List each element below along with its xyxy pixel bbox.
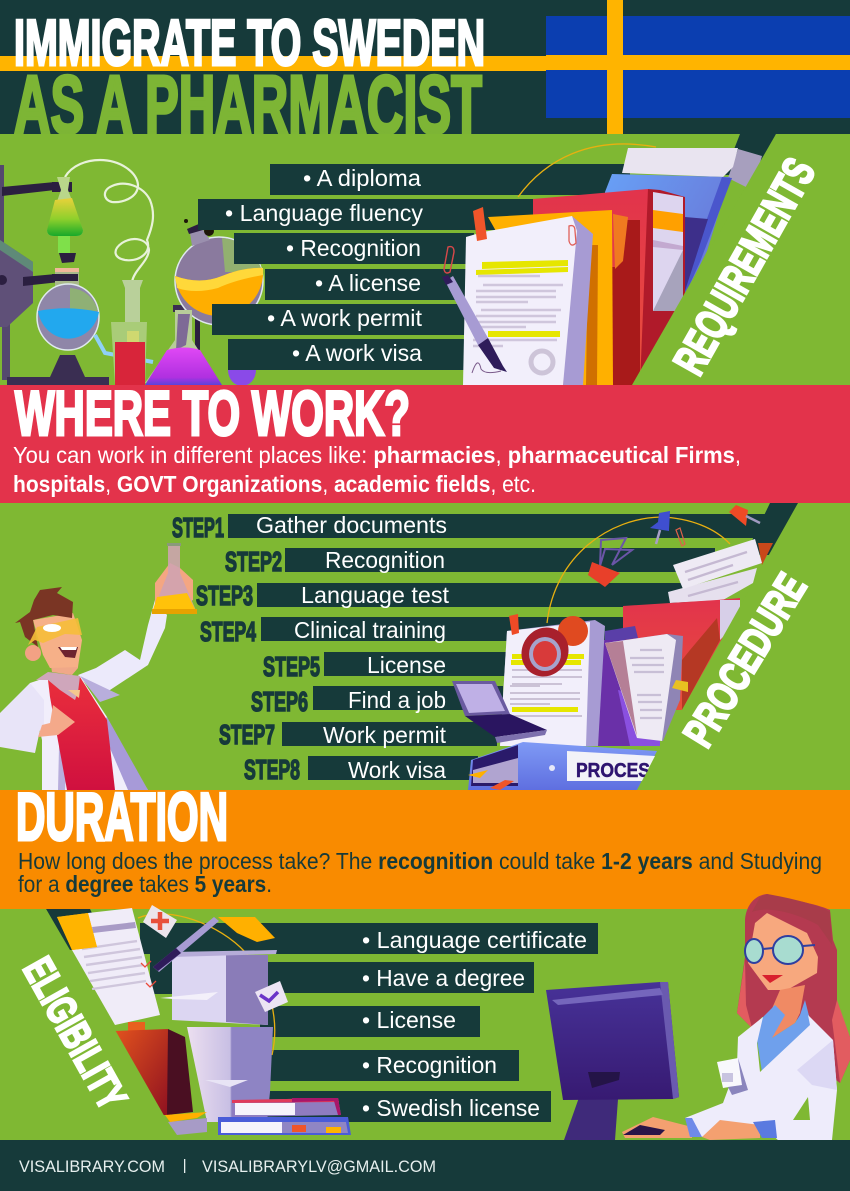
list: requirements: • A work visa [292, 340, 422, 366]
title [14, 18, 484, 134]
list: requirements [198, 164, 630, 370]
list: procedure steps: STEP7 [219, 719, 275, 750]
panel: eligibility [0, 894, 850, 1142]
icon: Swedish flag [0, 0, 850, 134]
list: eligibility: • License [362, 1007, 456, 1033]
list: eligibility: • Language certificate [362, 927, 587, 953]
list: procedure steps: STEP2 [225, 546, 282, 577]
list: requirements: • Language fluency [225, 200, 423, 226]
heading: ELIGIBILITY: ELIGIBILITY [14, 949, 136, 1117]
list: requirements: • A work permit [267, 305, 423, 331]
heading: duration: DURATION [16, 779, 228, 855]
list: procedure steps: Recognition [325, 547, 445, 573]
text block: workplaces: hospitals, GOVT Organizations, academic fields, etc. [13, 471, 536, 497]
list: eligibility: • Have a degree [362, 965, 525, 991]
list: procedure steps: STEP1 [172, 512, 224, 543]
list: requirements: • Recognition [286, 235, 421, 261]
list: eligibility: • Recognition [362, 1052, 497, 1078]
list: procedure steps: Find a job [348, 687, 446, 713]
text block: duration [18, 848, 822, 897]
footer [0, 1140, 850, 1191]
illustration: paper stacks [57, 905, 351, 1135]
illustration: stamped documents: PROCES [576, 760, 650, 782]
list: procedure steps: STEP5 [263, 651, 320, 682]
list: procedure steps: STEP8 [244, 754, 300, 785]
list: procedure steps: Work visa [348, 757, 446, 783]
footer: VISALIBRARYLV@GMAIL.COM [202, 1157, 436, 1176]
list: procedure steps: Work permit [323, 722, 447, 748]
illustration: computer monitor [546, 982, 679, 1140]
list: procedure steps: Clinical training [294, 617, 446, 643]
text block: workplaces: You can work in different places like: pharmacies, pharmaceutical Firms, [13, 442, 741, 468]
panel: requirements [0, 134, 850, 386]
list: procedure steps: STEP3 [196, 580, 253, 611]
title: IMMIGRATE TO SWEDEN [14, 6, 485, 79]
list: eligibility [140, 923, 598, 1122]
illustration: stamped documents [452, 505, 773, 790]
illustration: books and documents [442, 144, 762, 385]
header band [0, 0, 850, 134]
illustration: laboratory glassware [0, 160, 263, 386]
title: AS A PHARMACIST [14, 58, 482, 151]
text block: duration: How long does the process take? The recognition could take 1-2 years and Studying [18, 848, 822, 874]
list: requirements: • A diploma [303, 165, 421, 191]
list: procedure steps: STEP4 [200, 616, 256, 647]
illustration: pharmacist at computer [622, 894, 850, 1142]
text block: workplaces [13, 442, 741, 497]
list: procedure steps [172, 512, 768, 785]
footer: VISALIBRARY.COM [19, 1157, 165, 1176]
panel: where to work [0, 379, 850, 503]
heading: where to work: WHERE TO WORK? [15, 379, 410, 449]
list: eligibility: • Swedish license [362, 1095, 540, 1121]
illustration: pharmacist with flask [0, 543, 197, 790]
list: procedure steps: Language test [301, 582, 450, 608]
text block: duration: for a degree takes 5 years. [18, 871, 272, 897]
list: procedure steps: Gather documents [256, 512, 447, 538]
list: procedure steps: License [367, 652, 446, 678]
list: procedure steps: STEP6 [251, 686, 308, 717]
panel: procedure [0, 503, 850, 790]
list: requirements: • A license [315, 270, 421, 296]
panel: duration [0, 779, 850, 909]
